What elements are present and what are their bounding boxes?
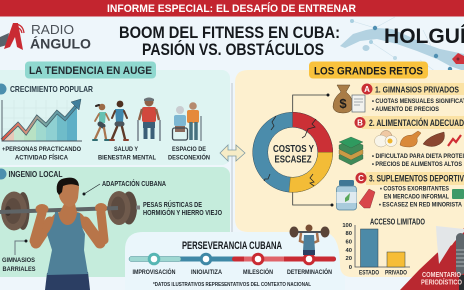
timeline labels: DETERMINACIÓN <box>287 267 332 276</box>
panel: perseverancia cubana <box>125 232 345 290</box>
timeline labels: IMPROVISACIÓN <box>132 267 176 276</box>
heading: la tendencia en auge <box>25 62 156 78</box>
footnote: *DATOS ILUSTRATIVOS REPRESENTATIVOS DEL CONTEXTO NACIONAL <box>153 282 312 288</box>
text: personas practicando: ACTIVIDAD FÍSICA <box>15 152 68 162</box>
subheading: ingenio local: INGENIO LOCAL <box>8 169 62 179</box>
arms <box>34 213 104 243</box>
item B: alimentación adecuada: B <box>357 118 363 128</box>
chart: acceso limitado: 0 <box>349 265 352 271</box>
item A: gimnasios privados <box>362 83 464 113</box>
callout: gimnasios barriales: BARRIALES <box>2 266 36 273</box>
callout: adaptación cubana: ADAPTACIÓN CUBANA <box>102 179 166 188</box>
text: salud y bienestar: BIENESTAR MENTAL <box>98 154 156 162</box>
corner: comentario periodístico <box>400 226 464 290</box>
text: personas practicando <box>2 146 81 162</box>
heading: los grandes retos <box>309 62 428 78</box>
ring label <box>273 143 314 166</box>
title: PASIÓN VS. OBSTÁCULOS <box>142 40 324 59</box>
item B: alimentación adecuada <box>354 116 464 168</box>
callout: gimnasios barriales <box>2 240 36 273</box>
callout: pesas rústicas: PESAS RÚSTICAS DE <box>143 200 202 209</box>
timeline labels: INIOIAITIZA <box>191 269 222 276</box>
icon: man with walker <box>138 98 160 141</box>
text: personas practicando: +PERSONAS PRACTICANDO <box>2 146 81 153</box>
item A: gimnasios privados: • AUMENTO DE PRECIOS <box>372 106 439 113</box>
heading: la tendencia en auge: LA TENDENCIA EN AUGE <box>29 65 152 77</box>
icon: elderly couple <box>172 102 201 141</box>
text: salud y bienestar: SALUD Y <box>114 146 139 153</box>
item A: gimnasios privados: A <box>364 85 370 94</box>
item C: suplementos deportivos: C <box>358 174 364 183</box>
chart: acceso limitado <box>342 218 425 276</box>
text: espacio de desconexión: DESCONEXIÓN <box>168 152 210 162</box>
chart: acceso limitado: 60 <box>346 240 352 246</box>
callout: gimnasios barriales: GIMNASIOS <box>2 257 35 264</box>
top banner: INFORME ESPECIAL: EL DESAFÍO DE ENTRENAR <box>107 2 356 15</box>
icon: two runners <box>93 101 128 140</box>
icon: supplement jar and price tag <box>336 180 375 210</box>
right weights <box>108 191 140 225</box>
title <box>119 24 340 59</box>
chart: acceso limitado: PRIVADO <box>385 270 407 276</box>
callout: adaptación cubana <box>82 179 166 196</box>
item C: suplementos deportivos <box>356 172 464 208</box>
logo: Radio Ángulo: ÁNGULO <box>30 36 91 52</box>
chart: rising trend <box>2 99 82 141</box>
ring label: ESCASEZ <box>274 154 312 166</box>
logo: Radio Ángulo: RADIO <box>31 22 74 37</box>
panel: ingenio local <box>0 167 230 277</box>
chart: acceso limitado: 80 <box>346 231 352 237</box>
microphone <box>456 233 464 290</box>
panel: la tendencia en auge <box>0 62 230 165</box>
tank top <box>47 212 88 275</box>
chart: acceso limitado: 100 <box>342 223 352 229</box>
top banner <box>0 0 464 16</box>
heading: los grandes retos: LOS GRANDES RETOS <box>314 66 423 78</box>
subheading: crecimiento popular <box>0 84 93 94</box>
ring label: COSTOS Y <box>273 143 314 155</box>
panel: los grandes retos <box>235 62 464 277</box>
icons: food <box>374 130 461 147</box>
chart: costos y escasez ring <box>253 112 333 192</box>
hair <box>57 178 79 195</box>
chart: acceso limitado: ACCESO LIMITADO <box>370 218 425 226</box>
subheading: ingenio local <box>0 168 62 180</box>
icon: money bag and receipt: $ <box>339 96 347 111</box>
illustration: weightlifter with barbell <box>0 178 140 290</box>
icon: stack of money <box>339 137 363 165</box>
map of Cuba with Holguín highlighted <box>340 17 464 78</box>
callout: pesas rústicas <box>143 200 222 217</box>
shorts <box>45 272 90 290</box>
icon: double arrow between panels <box>220 145 245 161</box>
callout: pesas rústicas: HORMIGÓN Y HIERRO VIEJO <box>143 208 222 217</box>
barbell <box>0 208 118 212</box>
subheading: crecimiento popular: CRECIMIENTO POPULAR <box>10 84 93 94</box>
neck and shoulders <box>50 204 86 232</box>
title: BOOM DEL FITNESS EN CUBA: <box>119 24 340 42</box>
heading: perseverancia cubana: PERSEVERANCIA CUBANA <box>182 240 282 252</box>
timeline <box>129 254 336 264</box>
logo: Radio Ángulo <box>0 22 91 52</box>
text: espacio de desconexión: ESPACIO DE <box>172 146 207 153</box>
hands <box>36 203 107 214</box>
left weights <box>1 192 30 230</box>
timeline labels <box>132 267 332 276</box>
icon: small weightlifter <box>290 224 330 255</box>
connector lines <box>293 94 334 206</box>
text: salud y bienestar <box>98 146 156 162</box>
timeline labels: MILESCIÓN <box>243 267 273 276</box>
text: espacio de desconexión <box>168 146 210 162</box>
chart: acceso limitado: 40 <box>346 248 352 254</box>
chart: acceso limitado: ESTADO <box>359 270 379 276</box>
icon: money bag and receipt <box>333 85 365 113</box>
chart: acceso limitado: 20 <box>346 256 352 262</box>
head <box>58 179 79 207</box>
